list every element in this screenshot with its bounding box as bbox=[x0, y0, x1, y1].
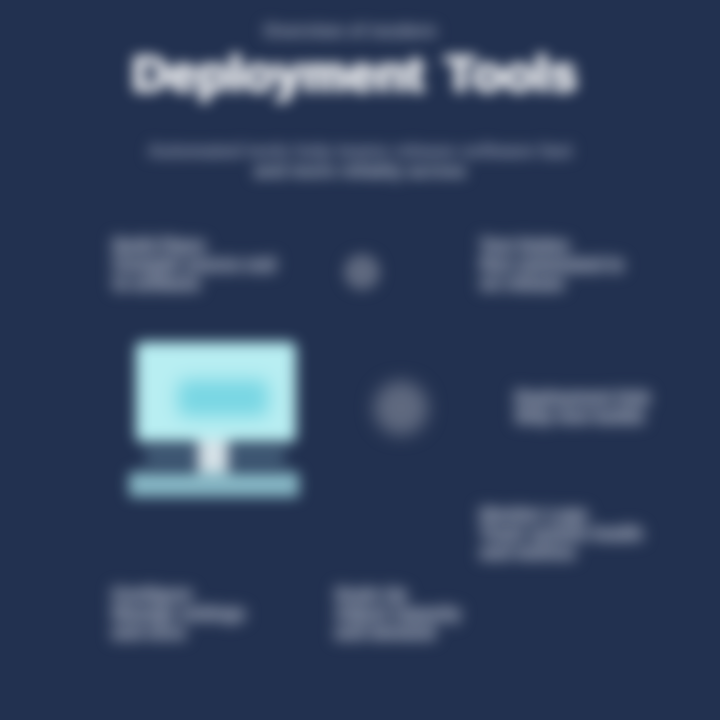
text block: lower right: Monitor Logs bbox=[480, 505, 588, 524]
text block: top left bbox=[104, 229, 284, 300]
text block: top right: Run automated te bbox=[480, 255, 624, 274]
text block: bottom left: Configure bbox=[112, 585, 192, 604]
text block: bottom left bbox=[103, 578, 252, 649]
monitor stand bbox=[198, 440, 228, 472]
subtitle line 2: and more reliably across bbox=[254, 161, 466, 181]
text block: bottom centre: Adjust capacity bbox=[335, 604, 461, 623]
text block: bottom centre: Scale Up bbox=[335, 585, 407, 604]
subtitle bbox=[144, 138, 576, 186]
text block: middle right: Ship new builds bbox=[515, 407, 644, 426]
text block: lower right: Track system health bbox=[480, 524, 643, 543]
eyebrow text: Overview of modern bbox=[263, 21, 437, 41]
text block: top left: to artifacts bbox=[113, 274, 200, 293]
text block: top left: Build Pipes bbox=[113, 236, 206, 255]
monitor screen bbox=[136, 342, 296, 442]
screen chart highlight bbox=[178, 380, 268, 416]
text block: lower right: and metrics bbox=[480, 543, 575, 562]
monitor side bars bbox=[145, 450, 285, 464]
text block: top right bbox=[472, 230, 631, 300]
subtitle line 1: Automated tools help teams release software fast bbox=[148, 141, 572, 161]
text block: bottom centre: and demand bbox=[335, 623, 435, 642]
title: Deployment Tools bbox=[132, 46, 578, 102]
text block: bottom centre bbox=[327, 579, 468, 649]
icon: top centre dot bbox=[344, 254, 380, 290]
text block: bottom left: and envs bbox=[112, 623, 186, 642]
monitor base bbox=[129, 472, 299, 497]
icon: centre dot bbox=[374, 381, 428, 435]
text block: top left: Compile source cod bbox=[113, 255, 275, 274]
text block: bottom left: Manage settings bbox=[112, 604, 245, 623]
text block: top right: Test Suites bbox=[480, 236, 569, 255]
text block: middle right bbox=[506, 382, 658, 434]
text block: middle right: Deployment Hub bbox=[515, 388, 650, 407]
text block: lower right bbox=[471, 498, 650, 569]
text block: top right: on release bbox=[480, 274, 564, 293]
icon: monitor bbox=[120, 331, 308, 507]
